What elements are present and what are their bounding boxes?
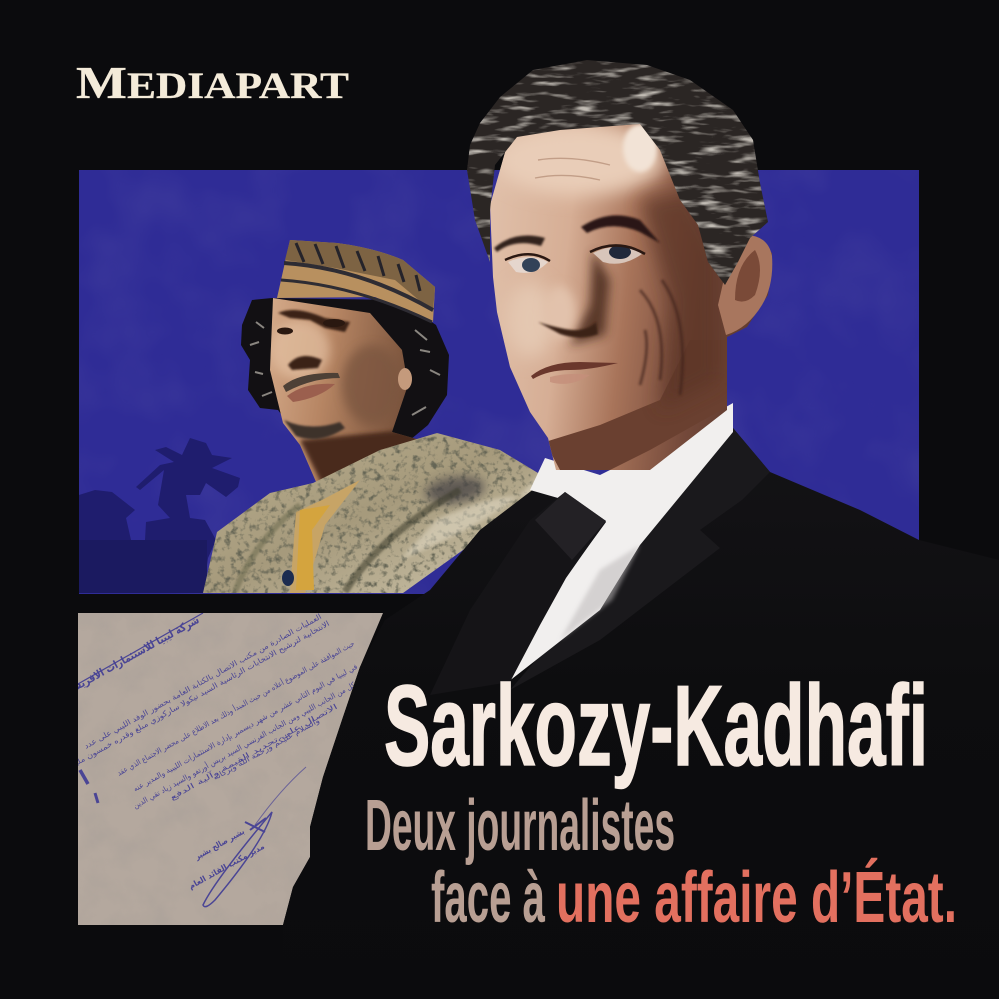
document text: الانتخابية لترشيح الانتخابات الرئاسية السيد نيكولا ساركوزي مبلغ وقدره خمسون مليون	[64, 619, 331, 772]
shirt	[508, 403, 733, 682]
document text: في ليبيا في اليوم الثاني عشر من شهر ديسمبر بإدارة الاستثمارات الليبية والمدير عنه	[132, 662, 359, 793]
document text	[64, 612, 359, 891]
panel: blue backdrop	[79, 170, 919, 594]
document text: حيث الموافقة على الموضوع أعلاه من حيث المبدأ وذلك بعد الاطلاع على محضر الاجتماع الذي عقد	[115, 638, 356, 778]
mouth	[531, 362, 618, 379]
ear	[398, 368, 412, 390]
document text: بكل من الجانب الليبي ومن الجانب الفرنسي السيد بريس أورتفو والسيد زياد تقي الدين	[131, 678, 359, 810]
subheading line 1: Deux journalistes	[365, 786, 675, 866]
logo: Mediapart: MEDIAPART	[76, 57, 349, 108]
document text: شركة ليبيا للاستثمارات الافريقية	[64, 613, 201, 697]
neck and face	[270, 298, 417, 482]
hat	[277, 240, 435, 322]
brows	[494, 236, 545, 252]
icon: palm tree silhouettes	[79, 438, 240, 593]
tie	[430, 492, 606, 695]
hair	[467, 60, 768, 285]
document text: مدير مكتب القائد العام	[187, 842, 266, 891]
nose base	[538, 322, 598, 338]
document text: والسلام عليكم ورحمة الله وبركاته	[212, 716, 321, 782]
robe	[200, 430, 540, 595]
suit	[283, 428, 999, 999]
ear	[718, 235, 772, 335]
portrait: Sarkozy	[283, 60, 919, 925]
portrait: Kadhafi	[200, 240, 540, 595]
suit lapel	[510, 428, 770, 690]
document text: بشير صالح بشير	[193, 827, 246, 862]
neck and face	[485, 115, 775, 475]
panel: scanned document	[64, 612, 388, 925]
hair	[241, 298, 449, 440]
eyes	[508, 257, 548, 273]
wrinkles	[640, 280, 683, 395]
document text: الاتصال على تحديد القيمة وآلية الدفع	[168, 701, 339, 802]
document text: العمليات الصادرة من مكتب الاتصال بالكتابة العامة بحضور الوفد الليبي على عدد	[82, 612, 323, 751]
subheading line 2: face à	[431, 858, 546, 938]
header rule, margin marks and signature	[78, 613, 306, 907]
